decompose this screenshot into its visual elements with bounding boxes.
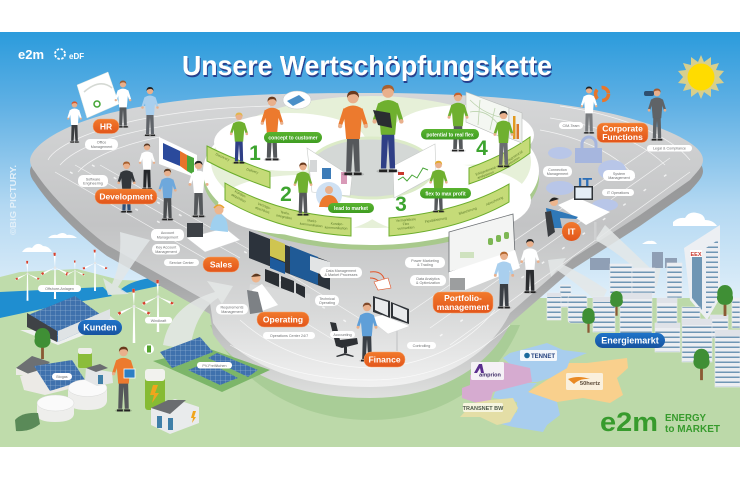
title: Unsere Wertschöpfungskette bbox=[182, 50, 552, 81]
Software Engineering label: Software bbox=[86, 177, 100, 181]
Windkraft label bbox=[145, 317, 172, 324]
System Management label: System bbox=[613, 172, 625, 176]
chair bbox=[330, 322, 358, 357]
wall: step 3: vermarkten bbox=[397, 225, 415, 231]
Requirements Management label bbox=[216, 304, 248, 314]
wall: step 4 bbox=[469, 137, 530, 184]
logo: e2m white: e2m bbox=[18, 47, 44, 62]
person: lead man bbox=[294, 163, 312, 216]
IT security diagram: IT bbox=[578, 176, 592, 193]
icon: lead portrait circle bbox=[316, 182, 342, 208]
IT Operations label: IT Operations bbox=[607, 191, 629, 195]
Operations Center label: Operations Center 24/7 bbox=[270, 334, 308, 338]
lead to market label: lead to market bbox=[334, 206, 368, 212]
Windkraft label: Windkraft bbox=[151, 319, 166, 323]
HR label bbox=[93, 119, 119, 134]
Offshore-Anlagen label: Offshore-Anlagen bbox=[45, 287, 74, 291]
Legal and Compliance label: Legal & Compliance bbox=[653, 147, 686, 151]
portfolio control board and desk bbox=[449, 214, 520, 290]
Power Marketing label: Power Marketing bbox=[411, 259, 439, 263]
Data Management label: & Market Processes bbox=[324, 273, 358, 277]
Accounting label bbox=[330, 331, 355, 338]
Amprion label bbox=[471, 362, 504, 380]
Portfolio-management label: Portfolio- bbox=[444, 293, 482, 303]
wall: step 4: Erlöspotenzial bbox=[475, 165, 497, 177]
Energiemarkt label bbox=[595, 333, 665, 348]
Accounting label: Accounting bbox=[333, 333, 352, 337]
IT security diagram bbox=[546, 137, 626, 211]
System Management label bbox=[603, 170, 635, 181]
platform tracks bbox=[48, 106, 690, 380]
board: lead to market process bbox=[307, 148, 352, 196]
logo: Energy to Market: ENERGY bbox=[665, 413, 706, 424]
flex to max profit label: flex to max profit bbox=[425, 191, 466, 197]
step number 4: 4 bbox=[476, 137, 488, 160]
Development board bbox=[159, 137, 197, 178]
Requirements Management label: Requirements bbox=[221, 306, 244, 310]
person: flex woman bbox=[429, 161, 448, 213]
Corporate Functions label: Corporate bbox=[602, 124, 643, 134]
region: 50Hertz bbox=[528, 358, 628, 403]
Account Management label: Management bbox=[157, 236, 178, 240]
Kunden label: Kunden bbox=[83, 322, 117, 332]
operating desk with monitors bbox=[247, 269, 310, 316]
central stage disc bbox=[203, 96, 539, 250]
wall: step 2: akquisition bbox=[230, 193, 247, 204]
Energiemarkt label: Energiemarkt bbox=[601, 336, 659, 346]
IT label bbox=[562, 222, 581, 241]
person: developer woman in blue bbox=[158, 169, 177, 221]
wall: step 2: Kunden- bbox=[331, 222, 344, 226]
logo: Energy to Market: to MARKET bbox=[665, 424, 720, 435]
person: central woman bbox=[372, 85, 404, 173]
Biogas label: Biogas bbox=[56, 375, 68, 379]
Finance label: Finance bbox=[368, 354, 401, 364]
EEX tower bbox=[684, 225, 720, 320]
lead to market label bbox=[328, 203, 374, 213]
Office Management label bbox=[85, 139, 118, 150]
Technical Operating label: Technical bbox=[319, 297, 335, 301]
wall: step 2 bbox=[225, 183, 351, 236]
EEX tower: EEX bbox=[690, 252, 702, 258]
region: TenneT bbox=[493, 343, 587, 432]
concept to customer label: concept to customer bbox=[268, 136, 318, 142]
Office Management label: Management bbox=[91, 145, 112, 149]
50Hertz label: 50hertz bbox=[580, 381, 600, 387]
Sales label: Sales bbox=[210, 260, 232, 270]
Sales label bbox=[203, 257, 239, 272]
credit: ©BIG PICTURY. bbox=[9, 165, 18, 235]
Biogas label bbox=[52, 373, 72, 380]
Development label: Development bbox=[99, 192, 153, 202]
Data Analytics label: & Optimization bbox=[416, 281, 440, 285]
city back row bbox=[590, 252, 740, 328]
Controlling label: Controlling bbox=[413, 344, 430, 348]
Account Management label: Account bbox=[161, 231, 174, 235]
logo: Energy to Market bbox=[600, 407, 720, 437]
Data Analytics label: Data Analytics bbox=[416, 277, 440, 281]
IT Operations label bbox=[602, 189, 634, 196]
person: HR woman in blue bbox=[141, 87, 159, 137]
icon: CIM colour ring bbox=[596, 88, 608, 100]
region: Amprion bbox=[462, 362, 532, 403]
person: central man bbox=[338, 91, 368, 176]
Software Engineering label: Engineering bbox=[83, 182, 103, 186]
Data Management label bbox=[320, 267, 362, 278]
CIM-Team label bbox=[559, 122, 583, 129]
left landscape with sea bbox=[0, 269, 240, 447]
icon: concept speech bubble bbox=[283, 91, 311, 109]
wall: step 3: Vermarktbare bbox=[396, 217, 416, 223]
person: concept woman bbox=[230, 113, 248, 164]
wall: step 1 bbox=[207, 146, 270, 188]
Germany grid map bbox=[460, 343, 628, 432]
PV field bbox=[153, 337, 270, 392]
clouds right bbox=[642, 213, 717, 244]
Requirements Management label: Management bbox=[221, 310, 243, 314]
person: developer man with tablet bbox=[117, 162, 136, 213]
PV-Freiflächen label bbox=[197, 362, 232, 368]
icon: clipboard bbox=[373, 110, 392, 128]
person: portfolio man bbox=[494, 252, 514, 309]
biogas digesters bbox=[15, 380, 107, 431]
wall: step 2: kommunikation bbox=[300, 222, 323, 228]
platform shadow on the ground bbox=[210, 325, 520, 420]
wall: step 2: Techn. bbox=[280, 210, 291, 216]
region: TransnetBW bbox=[460, 398, 518, 425]
value chain platform surface bbox=[30, 93, 703, 387]
city front row bbox=[547, 285, 740, 387]
person: legal woman with binoculars bbox=[648, 89, 666, 141]
person: concept man bbox=[261, 97, 283, 161]
finance icon: red arrows and cloud bbox=[370, 272, 391, 290]
wall: step 2: Markt- bbox=[307, 218, 317, 224]
Connection Management label bbox=[543, 166, 572, 177]
Corporate Functions label: Functions bbox=[602, 132, 643, 142]
wind turbines bbox=[15, 250, 174, 343]
wall: step 3: Abrechnung bbox=[485, 195, 504, 207]
logo: EDF bbox=[55, 49, 84, 61]
Power Marketing label: & Trading bbox=[417, 263, 433, 267]
finance desk bbox=[368, 296, 410, 351]
Key Account Management label: Management bbox=[155, 250, 177, 254]
clouds left bbox=[22, 233, 77, 252]
trees in the city bbox=[582, 285, 733, 380]
System Management label: Management bbox=[608, 176, 630, 180]
person: potential woman bbox=[493, 111, 514, 168]
Operating label bbox=[257, 312, 309, 327]
Software Engineering label bbox=[78, 175, 108, 187]
icon: binoculars bbox=[644, 91, 654, 96]
operations center wall display bbox=[249, 231, 330, 290]
barns with solar roof bbox=[16, 356, 85, 395]
board: flex potential network bbox=[466, 92, 522, 143]
Operating label: Operating bbox=[263, 314, 303, 324]
Data Management label: Data Management bbox=[326, 269, 356, 273]
Office Management label: Office bbox=[97, 141, 106, 145]
small battery and storage bbox=[78, 348, 113, 386]
wall: step 2: kommunikation bbox=[325, 225, 348, 231]
Development label bbox=[95, 189, 157, 204]
potential to real flex label: potential to real flex bbox=[426, 132, 474, 138]
wall: step 2: Integration bbox=[276, 213, 293, 221]
concept to customer label bbox=[264, 132, 322, 143]
person: developer woman bbox=[139, 143, 155, 190]
Amprion label: amprion bbox=[479, 372, 501, 378]
Legal and Compliance label bbox=[647, 145, 692, 152]
person: finance accountant bbox=[356, 303, 378, 362]
wall: step 2: Vertrags- bbox=[257, 202, 271, 210]
Offshore-Anlagen label bbox=[38, 285, 81, 292]
person: HR woman with poster bbox=[67, 101, 82, 143]
Portfolio-management label: management bbox=[437, 302, 489, 312]
value chain platform edge bbox=[30, 104, 703, 398]
icon: tablet bbox=[124, 369, 135, 378]
Operations Center label bbox=[263, 332, 315, 339]
CIM-Team label: CIM-Team bbox=[562, 124, 580, 128]
IT desk and operator bbox=[545, 186, 610, 240]
arrow: from platform to market bbox=[595, 225, 662, 286]
step number 2: 2 bbox=[280, 183, 292, 206]
Power Marketing label bbox=[405, 257, 445, 268]
wall: step 3: Flex bbox=[403, 222, 410, 226]
wall: step 3: Bilanzierung bbox=[458, 206, 477, 216]
step number 3: 3 bbox=[395, 193, 407, 216]
logo: EDF: eDF bbox=[69, 52, 84, 61]
IT label: IT bbox=[568, 226, 576, 236]
wall: step 4: analysieren bbox=[477, 170, 495, 180]
TransnetBW label bbox=[463, 403, 504, 412]
Key Account Management label bbox=[152, 244, 180, 254]
person: CIM team woman bbox=[581, 86, 597, 134]
board: flex trading chart bbox=[393, 144, 436, 198]
person: portfolio woman bbox=[520, 239, 540, 294]
arrow: from platform to customers bbox=[103, 232, 150, 295]
Finance label bbox=[364, 352, 405, 367]
Technical Operating label: Operating bbox=[319, 301, 335, 305]
wall: step 1: Delivery bbox=[246, 167, 259, 175]
Service Center label: Service Center bbox=[169, 261, 194, 265]
large battery bbox=[145, 369, 165, 410]
HR label: HR bbox=[100, 121, 112, 131]
person: potential man bbox=[448, 93, 468, 152]
Sales desk bbox=[187, 205, 240, 252]
arrow: from customers to platform bbox=[163, 281, 233, 350]
wall: step 1: Discovery bbox=[215, 152, 230, 162]
Technical Operating label bbox=[315, 295, 339, 306]
wall: step 3 bbox=[389, 184, 509, 236]
person: HR woman with medal bbox=[115, 80, 131, 128]
50Hertz label bbox=[566, 373, 603, 390]
storage container bbox=[151, 399, 199, 434]
Connection Management label: Connection bbox=[548, 168, 567, 172]
tree bbox=[34, 328, 51, 359]
icon: green battery badge bbox=[144, 344, 154, 354]
Controlling label bbox=[407, 342, 436, 349]
wall: step 2: Kunden- bbox=[234, 189, 247, 199]
TenneT label: TENNET bbox=[531, 354, 555, 360]
wall: step 4: aktivieren bbox=[506, 155, 521, 167]
PV-Freiflächen label: PV-Freiflächen bbox=[202, 364, 227, 368]
logo: Energy to Market: e2m bbox=[600, 407, 658, 437]
Key Account Management label: Key Account bbox=[156, 246, 176, 250]
person: developer man in white bbox=[188, 161, 209, 218]
step number 1: 1 bbox=[249, 142, 261, 165]
potential to real flex label bbox=[421, 129, 479, 140]
person: customer man with tablet bbox=[112, 347, 135, 412]
TenneT label bbox=[520, 350, 557, 361]
Kunden label bbox=[78, 320, 122, 335]
Service Center label bbox=[164, 259, 199, 266]
TransnetBW label: TRANSNET BW bbox=[463, 406, 504, 412]
factory with solar roof bbox=[20, 296, 118, 345]
Connection Management label: Management bbox=[547, 172, 568, 176]
Data Analytics label bbox=[410, 275, 446, 286]
flex to max profit label bbox=[420, 188, 471, 198]
Account Management label bbox=[151, 229, 184, 241]
wall: step 3: Flexibilisierung bbox=[424, 216, 447, 224]
wall: step 2: abschluss bbox=[255, 206, 270, 215]
wall: step 4: Erlöspotenzial bbox=[503, 150, 524, 165]
icon: sun bbox=[678, 55, 724, 99]
HR poster bbox=[77, 72, 119, 118]
Corporate Functions label bbox=[597, 123, 648, 142]
Portfolio-management label bbox=[433, 292, 493, 313]
arrow: from market to platform bbox=[548, 258, 607, 305]
